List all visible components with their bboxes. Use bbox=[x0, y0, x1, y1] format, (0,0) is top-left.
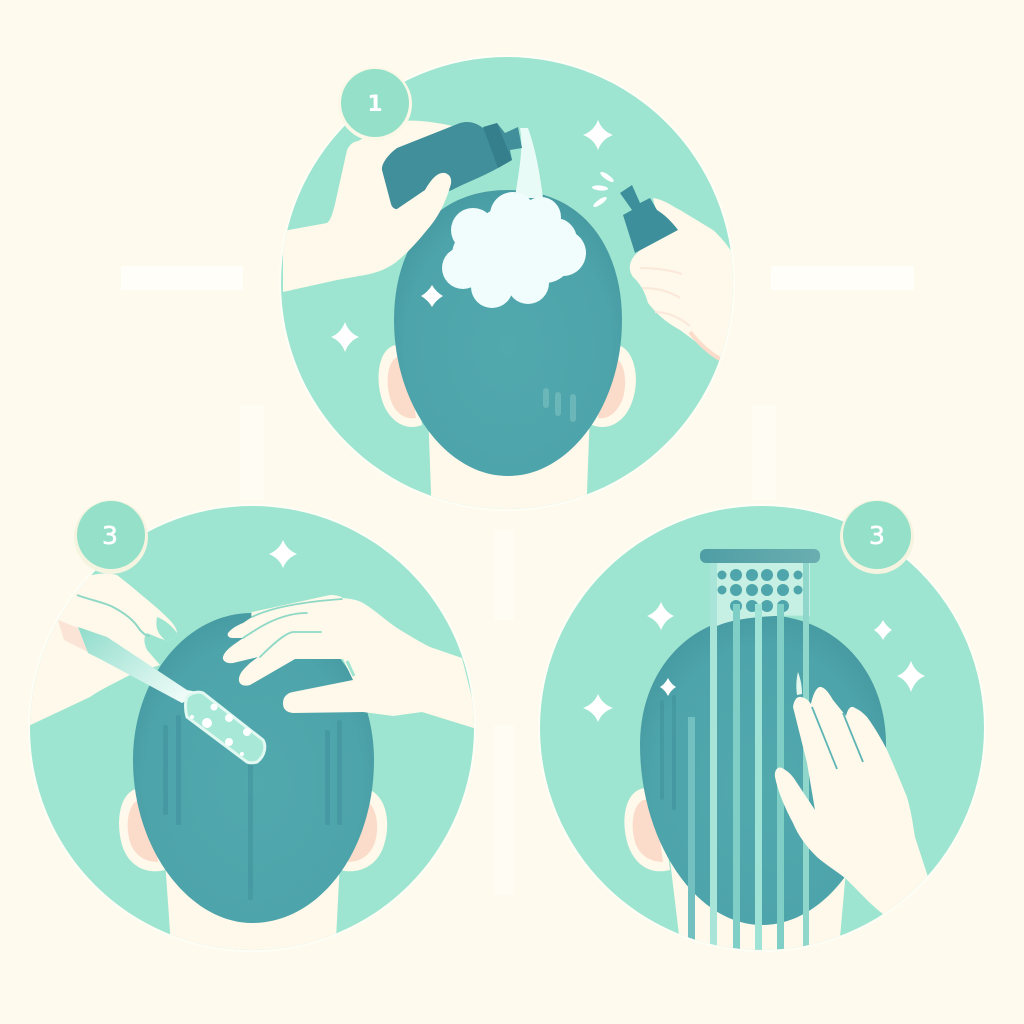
neck bbox=[670, 861, 846, 950]
spray droplets bbox=[592, 172, 614, 207]
dark hair strands bbox=[660, 695, 676, 810]
ears bbox=[119, 788, 165, 871]
bottle cap bbox=[483, 123, 512, 168]
spray bottle right bbox=[620, 185, 678, 253]
badge: step number 3 right bbox=[840, 500, 914, 574]
shampoo stream bbox=[515, 128, 543, 198]
water streams bbox=[688, 563, 809, 958]
sparkle bbox=[269, 540, 297, 568]
sparkles bbox=[647, 602, 674, 630]
hair highlights bbox=[543, 388, 576, 422]
hand holding brush bbox=[30, 574, 177, 726]
badge: step number 1: 1 bbox=[367, 92, 383, 117]
badge: step number 1 bbox=[338, 67, 412, 141]
badge: step number 3 right: 3 bbox=[869, 521, 885, 550]
ear right bbox=[592, 345, 636, 427]
ear bbox=[624, 788, 670, 871]
badge: step number 3 left bbox=[74, 500, 148, 574]
hand left bbox=[283, 121, 470, 292]
hand rinsing bbox=[775, 687, 940, 917]
ear left bbox=[379, 345, 422, 427]
sparkles bbox=[583, 120, 613, 150]
neck bbox=[166, 870, 340, 950]
head bbox=[394, 190, 622, 476]
panel: step 3 rinse bbox=[538, 504, 986, 960]
scalp brush bbox=[78, 627, 265, 763]
neck bbox=[428, 428, 590, 509]
panel: step 1 apply shampoo bbox=[279, 55, 740, 520]
foam bbox=[442, 192, 586, 308]
hand right bbox=[630, 198, 740, 362]
head bbox=[640, 615, 886, 925]
head bbox=[133, 613, 374, 923]
hair strands bbox=[163, 715, 342, 900]
right hand massaging bbox=[223, 595, 480, 730]
panel: step 2 massage scalp bbox=[20, 504, 480, 960]
thumb bbox=[396, 172, 452, 230]
bottle left bbox=[382, 122, 522, 209]
shower head bbox=[700, 549, 820, 563]
badge: step number 3 left: 3 bbox=[102, 521, 118, 550]
